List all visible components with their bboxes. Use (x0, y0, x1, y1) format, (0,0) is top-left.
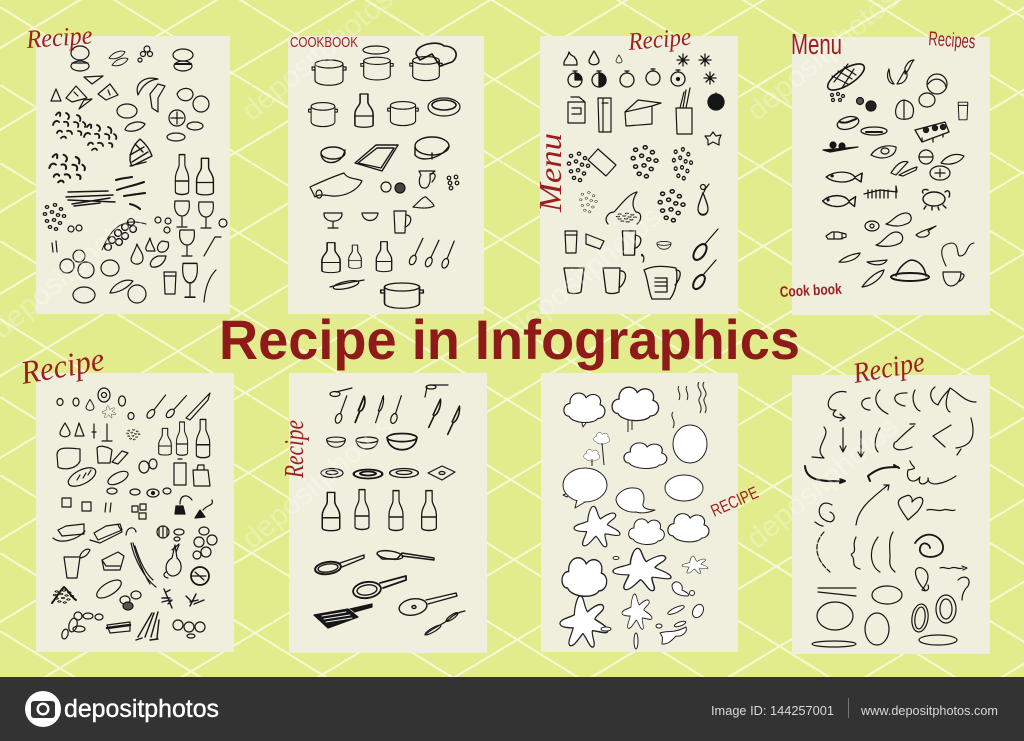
icon: boxes (568, 88, 721, 145)
icon: whisks (691, 229, 718, 291)
icon: vegetables top row (109, 46, 152, 66)
arrows: bold curved row (805, 461, 956, 484)
panel: speech bubbles (541, 373, 738, 652)
icon: bottles (175, 155, 213, 195)
icon: drops (656, 602, 706, 644)
icon: condiment bottles (159, 419, 210, 458)
icon: sausage chain (61, 612, 103, 640)
icon: grapes and nuts (43, 204, 171, 252)
icon: bowls (327, 434, 417, 450)
icon: tea bags (175, 496, 212, 518)
arrows: top row (828, 387, 976, 421)
website: www.depositphotos.com (860, 703, 998, 718)
panel: cutlery and pans (289, 373, 487, 653)
arrows: second row (812, 418, 973, 458)
panel: meat, fish and vegetables (792, 37, 990, 315)
icon: bread (57, 446, 157, 494)
icon: spatula (314, 604, 372, 628)
icon: crab (923, 189, 950, 210)
icon: egg tray (915, 122, 949, 142)
icon: poultry (826, 213, 936, 246)
icon: cheese triangles (51, 76, 118, 109)
icon: steam (672, 382, 706, 428)
panel: food sketches (36, 36, 230, 314)
icon: dough and rolling pin (310, 173, 362, 198)
icon: plates (321, 466, 455, 480)
icon: glasses (164, 201, 227, 302)
image id: Image ID: 144257001 (711, 703, 834, 718)
arrows: swirl and heart (815, 485, 955, 526)
watermarks: depositphotos (740, 410, 905, 555)
icon: timers (568, 69, 724, 110)
icon: jugs and kettle (564, 266, 680, 299)
icon: eggs (57, 388, 134, 420)
icon: jars and spoons (322, 237, 457, 273)
icon: bag and seeds (567, 146, 693, 222)
watermarks (0, 0, 905, 555)
icon: fruit (117, 88, 209, 141)
icon: splashes (560, 506, 709, 649)
icon: spoons and knives (330, 385, 462, 435)
label: COOKBOOK: COOKBOOK (290, 34, 358, 51)
watermarks: depositphotos (503, 200, 668, 345)
icon: pile and sausage (52, 576, 141, 610)
icon: onion and meat (164, 544, 209, 585)
label: Recipe, panel 5: Recipe (17, 342, 107, 392)
label: Menu: Menu (791, 29, 842, 61)
logo wordmark: depositphotos (64, 695, 219, 723)
icon: yogurt and cheese (64, 549, 124, 578)
icon: corn (824, 59, 868, 102)
icon: fish (823, 172, 897, 207)
icon: clouds (564, 387, 667, 469)
ovals and lines (812, 586, 957, 647)
icon: camera logo (25, 691, 61, 727)
icon: pears and apples (60, 238, 169, 303)
icon: pots (312, 43, 456, 85)
icon: ladles (145, 393, 210, 420)
label: Menu vertical: Menu (532, 133, 568, 213)
label: Recipe, panel 8: Recipe (850, 346, 927, 390)
label: Recipes: Recipes (928, 28, 976, 53)
icon: burgers (71, 46, 193, 71)
icon: flames and snow (564, 51, 716, 84)
brackets (817, 532, 895, 572)
title: Recipe in Infographics (219, 308, 800, 371)
icon: rolling pin and big pot (330, 279, 423, 308)
squiggles (916, 566, 969, 600)
icon: oval bubbles (563, 425, 707, 513)
icon: saucepans row (309, 94, 460, 127)
icon: tomatoes (173, 620, 205, 638)
icon: frying pans (314, 549, 457, 617)
icon: small tree clouds (584, 433, 610, 466)
icon: spaghetti (66, 191, 115, 206)
icon: bananas (137, 78, 165, 112)
label: Recipe, panel 1: Recipe (24, 20, 93, 54)
icon: steaming cup (942, 243, 974, 286)
icon: rings and squares (62, 488, 171, 519)
panel: ingredients and timers (540, 36, 738, 314)
icon: sauce packs (174, 459, 210, 486)
watermarks: depositphotos (235, 410, 400, 555)
panel: cookware sketches (288, 36, 484, 314)
panel: arrows and ovals (792, 375, 990, 654)
panel: pantry sketches (36, 373, 234, 652)
icon: cake and dishes (839, 253, 929, 287)
icon: artichoke (130, 139, 152, 166)
label: Recipe, panel 3: Recipe (626, 24, 692, 56)
icon: baking dishes (321, 137, 449, 171)
icon: tongs (424, 611, 465, 636)
footer bar (0, 677, 1024, 741)
icon: cheese and avocado (823, 142, 964, 180)
icon: butter (53, 524, 136, 543)
icon: herbs (162, 589, 204, 608)
icon: pasta (49, 112, 145, 209)
icon: small shapes (60, 423, 140, 441)
icon: cups (324, 211, 411, 233)
icon: glasses and bowls (565, 231, 671, 262)
label: Cook book: Cook book (779, 281, 843, 301)
icon: chives (131, 543, 156, 587)
icon: peppers and tomatoes (856, 60, 968, 120)
icon: oil bottles (322, 490, 436, 531)
icon: garlic and potatoes (157, 526, 217, 559)
icon: meat slices (836, 114, 887, 135)
icon: cheese slices and carrots (107, 612, 159, 640)
label: Recipe, vertical: Recipe (279, 420, 309, 479)
label: RECIPE: RECIPE (708, 483, 761, 521)
icon: flour hill and drops (606, 184, 709, 224)
icon: shakers and jug (381, 171, 459, 208)
icon: spiral (915, 535, 943, 557)
